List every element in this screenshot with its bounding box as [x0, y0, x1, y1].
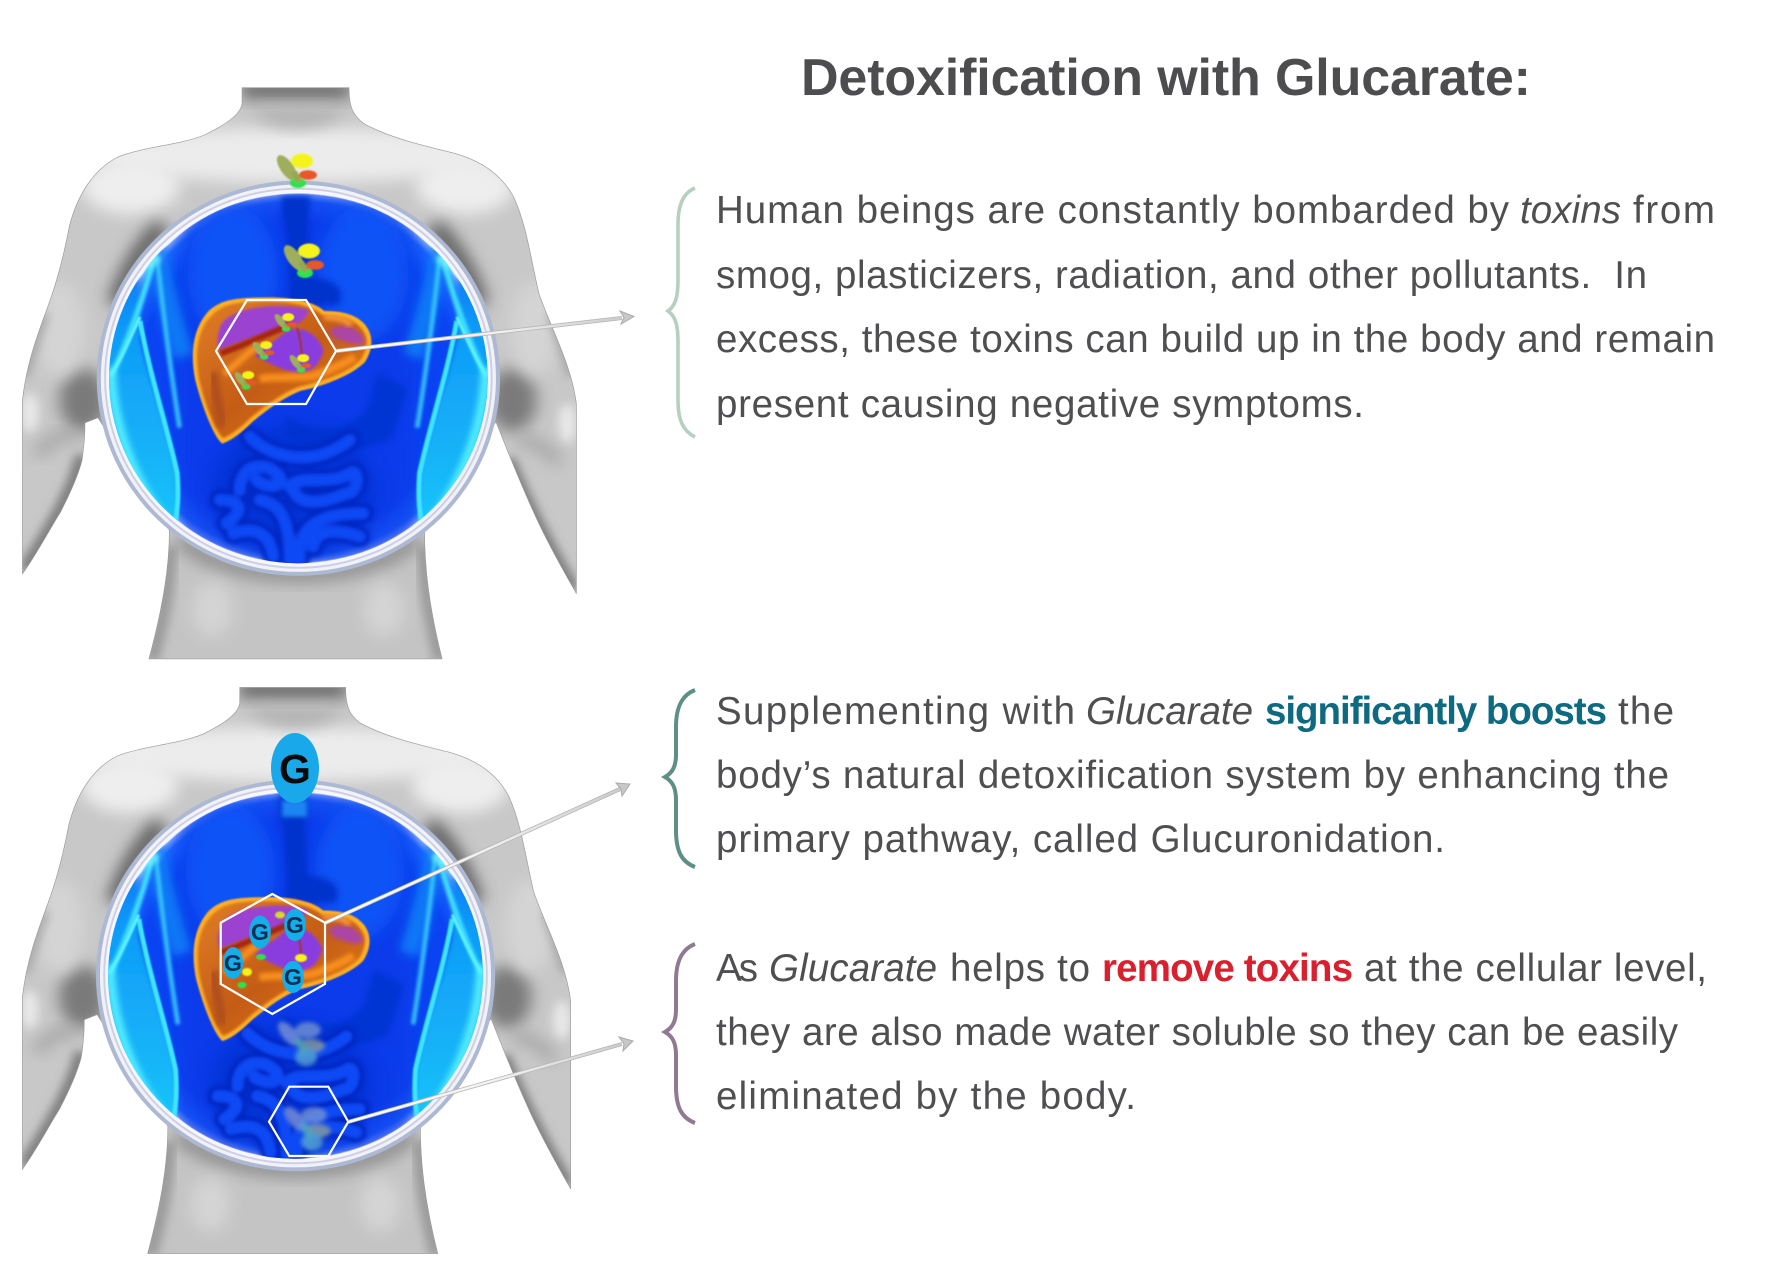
text block: glucarate boost: significantly boosts — [1265, 690, 1607, 733]
text block: toxins: Human beings are constantly bombarded by — [716, 189, 1510, 232]
text block: toxins: from — [1633, 189, 1715, 232]
text block: glucarate boost: the — [1618, 690, 1674, 733]
liver with glucarate badges — [194, 897, 370, 1041]
text block: glucarate boost: Supplementing with — [716, 690, 1075, 733]
text block: toxins: smog, plasticizers, radiation, and other pollutants. In — [716, 254, 1647, 297]
text block: toxins: toxins — [1520, 189, 1621, 232]
icon: toxin cluster at neck — [273, 152, 317, 188]
text block: toxin removal: Glucarate — [769, 947, 937, 990]
text block: toxins: present causing negative symptoms. — [716, 383, 1364, 426]
brace: boost text — [665, 690, 695, 867]
brace: toxins text — [668, 188, 695, 437]
text block: glucarate boost: primary pathway, called Glucuronidation. — [716, 818, 1445, 861]
liver with glucarate badges: G — [284, 964, 302, 990]
liver with glucarate badges: G — [251, 919, 269, 945]
text block: toxin removal — [716, 947, 1707, 1118]
liver with glucarate badges: G — [224, 950, 242, 976]
figure: torso with toxins in the liver — [21, 80, 634, 665]
title: Detoxification with Glucarate: — [801, 49, 1531, 107]
text block: toxin removal: eliminated by the body. — [716, 1075, 1136, 1118]
liver with glucarate badges: G — [286, 912, 304, 938]
arrow: intestine to elimination text — [348, 1037, 633, 1122]
icon: glucarate capsule at neck: G — [279, 746, 311, 792]
icon: glucarate capsule at neck — [271, 733, 319, 803]
arrow: liver to toxins text — [336, 311, 634, 351]
text block: toxins: excess, these toxins can build up in the body and remain — [716, 318, 1715, 361]
text block: glucarate boost — [716, 690, 1674, 861]
figure: torso with glucarate — [21, 680, 633, 1259]
text block: toxin removal: at the cellular level, — [1364, 947, 1707, 990]
hexagon highlight on liver — [216, 300, 336, 404]
liver with toxins — [193, 297, 371, 444]
faded toxins in lower intestine — [280, 1103, 331, 1151]
brace: elimination text — [665, 944, 695, 1123]
hexagon highlight on intestine — [269, 1087, 348, 1156]
icon: toxin cluster in chest — [280, 242, 324, 278]
text block: toxins — [716, 189, 1715, 426]
text block: glucarate boost: body’s natural detoxification system by enhancing the — [716, 754, 1669, 797]
text block: toxin removal: they are also made water soluble so they can be easily — [716, 1011, 1679, 1054]
arrow: liver to boost text — [325, 783, 630, 923]
text block: toxin removal: remove toxins — [1102, 947, 1353, 990]
text block: toxin removal: helps to — [950, 947, 1090, 990]
faded toxins in intestine — [274, 1018, 325, 1066]
text block: toxin removal: As — [716, 947, 758, 990]
esophagus highlight — [282, 800, 307, 817]
text block: glucarate boost: Glucarate — [1086, 690, 1253, 733]
hexagon highlight on liver — [221, 894, 325, 1014]
